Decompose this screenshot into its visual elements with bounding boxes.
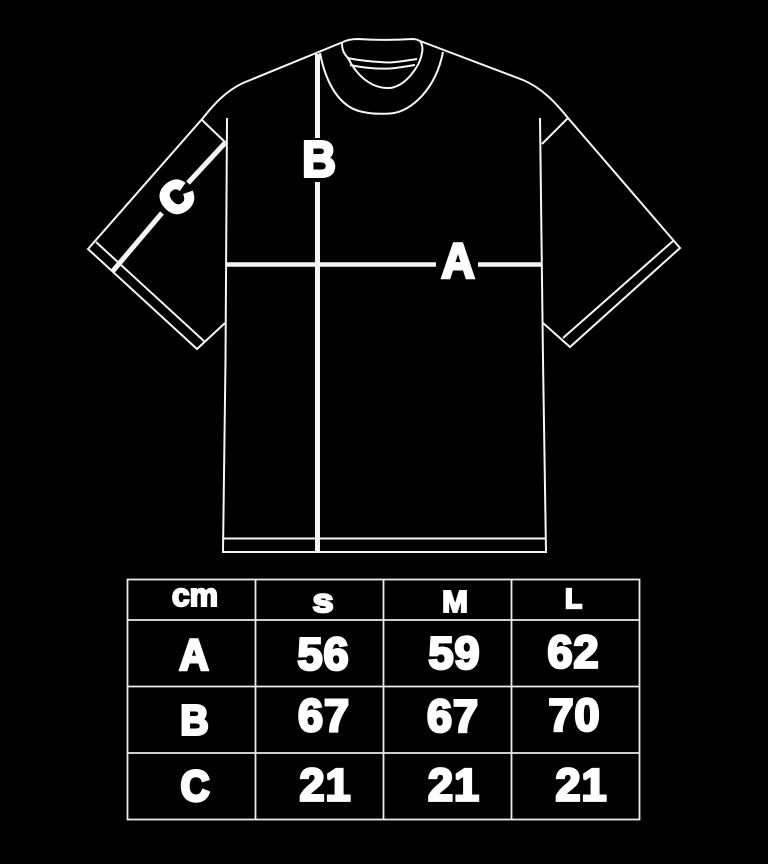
collar top edge [343, 39, 421, 42]
row C [181, 760, 608, 810]
hem stitch line [223, 538, 545, 540]
A letter: A [441, 234, 475, 289]
row B: 67 [298, 690, 350, 741]
row C: 21 [555, 760, 608, 810]
C line [112, 143, 225, 272]
inner neck opening [342, 42, 422, 88]
body sides and hem [223, 118, 546, 552]
row B: 67 [427, 690, 479, 742]
left armhole seam [202, 120, 226, 143]
header row: M [442, 584, 468, 619]
header row [172, 577, 582, 619]
C letter: C [150, 170, 203, 225]
row A: 59 [428, 628, 481, 678]
back collar lines [347, 58, 417, 62]
right armhole seam [542, 118, 568, 144]
row B: 70 [548, 690, 601, 740]
right sleeve cuff [563, 241, 673, 338]
B letter: B [302, 132, 336, 188]
row A: A [179, 630, 209, 679]
header row: s [312, 582, 334, 619]
row A: 56 [297, 628, 350, 680]
row B [180, 690, 601, 744]
header row: cm [172, 577, 218, 613]
left sleeve cuff [96, 242, 205, 342]
row C: 21 [299, 760, 352, 810]
row A: 62 [547, 626, 600, 678]
measure C: sleeve width [112, 143, 225, 272]
A line [226, 262, 542, 267]
left shoulder and sleeve outline [88, 42, 343, 349]
B line [315, 54, 320, 552]
row C: C [181, 762, 209, 810]
size table [128, 577, 640, 820]
outer collar ribbing [320, 52, 443, 114]
row B: B [180, 696, 209, 744]
row A [179, 626, 600, 680]
right shoulder and sleeve outline [420, 41, 680, 347]
table grid [128, 580, 640, 820]
header row: L [565, 583, 582, 614]
row C: 21 [428, 760, 480, 810]
t-shirt outline diagram [88, 39, 680, 552]
